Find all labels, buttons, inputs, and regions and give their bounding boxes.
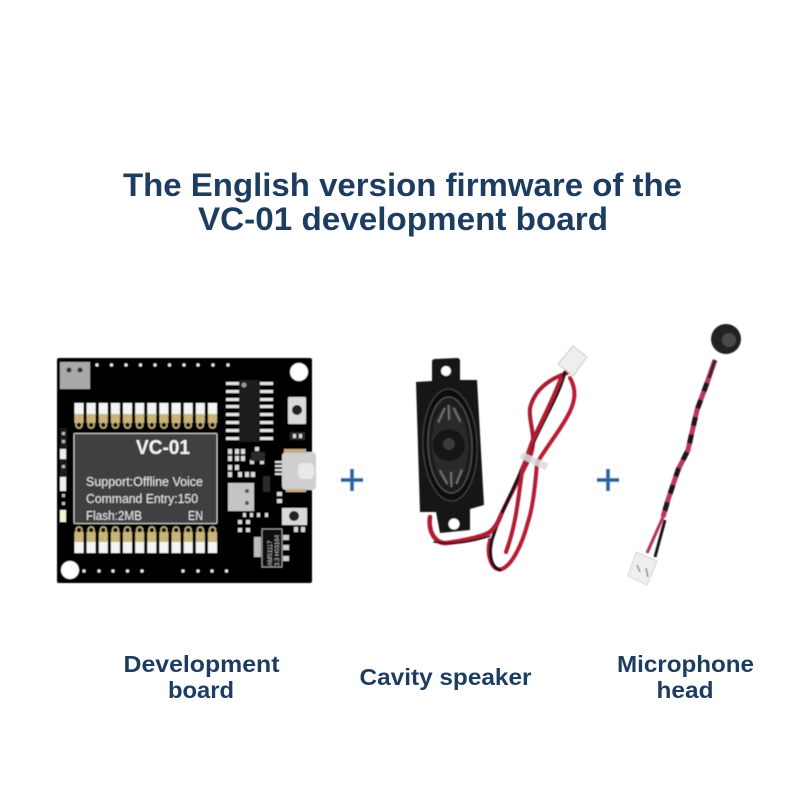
micro USB port xyxy=(275,449,316,492)
microphone head xyxy=(711,324,741,354)
label: microphone head: head xyxy=(656,677,714,703)
module text: Support:Offline Voice xyxy=(86,475,203,489)
bottom pads xyxy=(74,527,217,553)
title xyxy=(123,167,682,237)
title: VC-01 development board xyxy=(198,201,608,237)
development board xyxy=(57,358,316,583)
small components xyxy=(228,447,305,532)
speaker connector xyxy=(558,346,587,376)
label: microphone head xyxy=(617,651,754,703)
IC chip xyxy=(226,380,273,442)
module text xyxy=(86,437,203,523)
plus sign 1 xyxy=(341,469,363,491)
voltage regulator xyxy=(254,529,289,567)
label: development board: Development xyxy=(124,651,280,677)
label: microphone head: Microphone xyxy=(617,651,754,677)
lower button xyxy=(282,508,307,525)
module text: EN xyxy=(188,509,203,523)
microphone xyxy=(628,324,741,585)
module text: Command Entry:150 xyxy=(86,492,198,506)
module text: VC-01 xyxy=(136,437,190,459)
label: development board xyxy=(124,651,280,703)
title: The English version firmware of the xyxy=(123,167,682,203)
clear wire tie xyxy=(521,455,547,467)
mounting holes xyxy=(61,363,308,579)
speaker housing xyxy=(416,358,484,533)
speaker wires xyxy=(430,372,574,570)
speaker cone xyxy=(421,388,479,502)
left side components xyxy=(60,428,67,522)
twisted wire xyxy=(647,360,715,557)
voltage regulator: AMS1117 xyxy=(268,540,274,566)
speaker xyxy=(416,346,587,570)
module text: Flash:2MB xyxy=(86,509,142,523)
label: development board: board xyxy=(168,677,234,703)
plus sign 2 xyxy=(597,469,619,491)
module shield xyxy=(74,434,217,524)
top pads xyxy=(74,403,217,428)
microphone connector xyxy=(628,552,657,585)
white connector xyxy=(228,483,254,511)
top button xyxy=(288,397,306,424)
label: cavity speaker: Cavity speaker xyxy=(360,664,532,690)
voltage regulator: 3.3 H03164 xyxy=(275,534,281,566)
top and bottom header dots xyxy=(82,363,230,573)
power connector xyxy=(60,362,90,389)
